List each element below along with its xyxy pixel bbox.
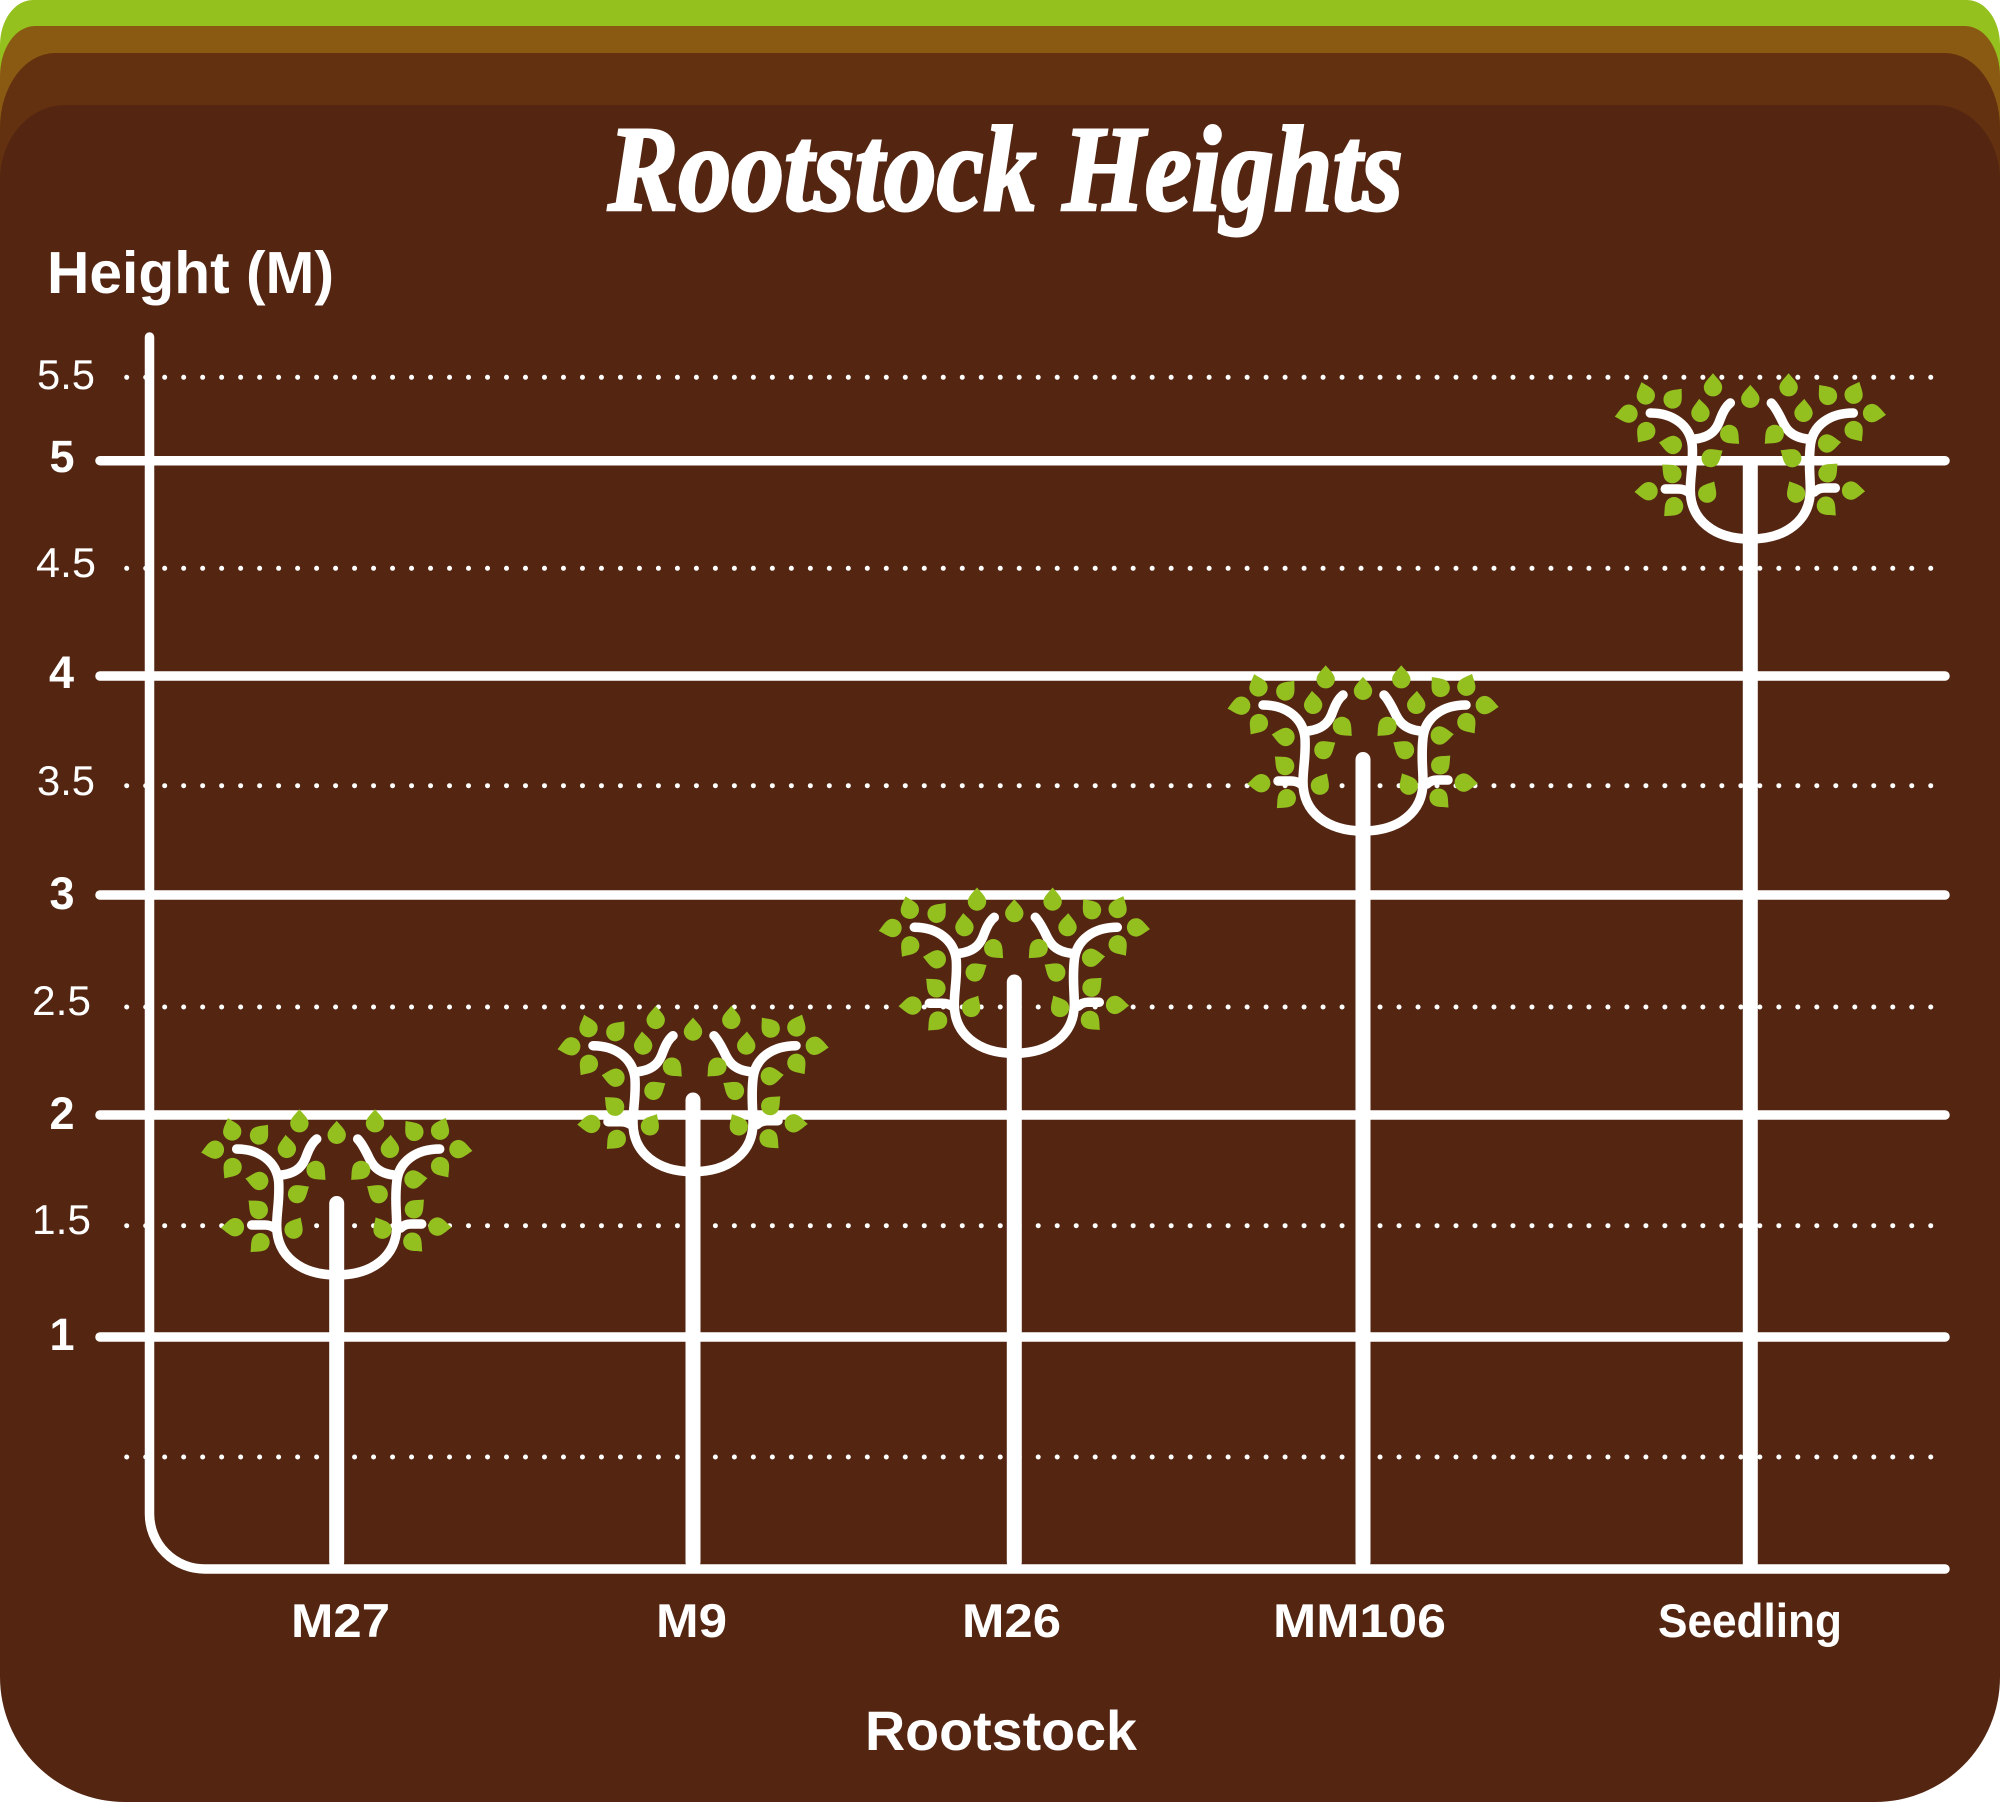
whole-metre solid gridlines: [100, 461, 1945, 1337]
y axis half-metre labels: 1.5: [32, 1196, 91, 1243]
y axis whole-metre labels: 4: [49, 647, 74, 698]
y axis half-metre labels: 5.5: [37, 351, 95, 398]
y axis title: Height (M): [47, 240, 334, 306]
x axis category labels: M26: [962, 1594, 1061, 1647]
y axis whole-metre labels: 3: [50, 868, 75, 919]
subsoil layer: [0, 53, 2000, 300]
half-metre dotted gridlines: [127, 377, 1934, 1457]
y axis whole-metre labels: 2: [50, 1088, 75, 1139]
y axis whole-metre labels: [49, 431, 75, 1360]
x axis category labels: M9: [656, 1594, 727, 1647]
x axis category labels: [291, 1594, 1842, 1647]
tree: MM106: [1226, 665, 1500, 1562]
title: Rootstock Heights: [607, 102, 1403, 237]
grass layer: [0, 0, 2000, 300]
y axis whole-metre labels: 1: [50, 1309, 75, 1360]
y axis half-metre labels: 3.5: [37, 757, 95, 804]
y axis half-metre labels: [32, 351, 96, 1243]
topsoil layer: [0, 26, 2000, 300]
y axis half-metre labels: 4.5: [36, 539, 96, 586]
tree: M27: [199, 1109, 474, 1562]
x axis title: Rootstock: [865, 1699, 1138, 1762]
x axis category labels: M27: [291, 1594, 390, 1647]
tree: M26: [877, 888, 1151, 1562]
tree: M9: [556, 1006, 830, 1562]
x axis category labels: MM106: [1273, 1594, 1446, 1647]
tree: Seedling: [1613, 373, 1887, 1569]
x axis category labels: Seedling: [1658, 1594, 1842, 1647]
chart axes: [150, 337, 1945, 1569]
y axis whole-metre labels: 5: [50, 431, 75, 482]
y axis half-metre labels: 2.5: [32, 977, 91, 1024]
